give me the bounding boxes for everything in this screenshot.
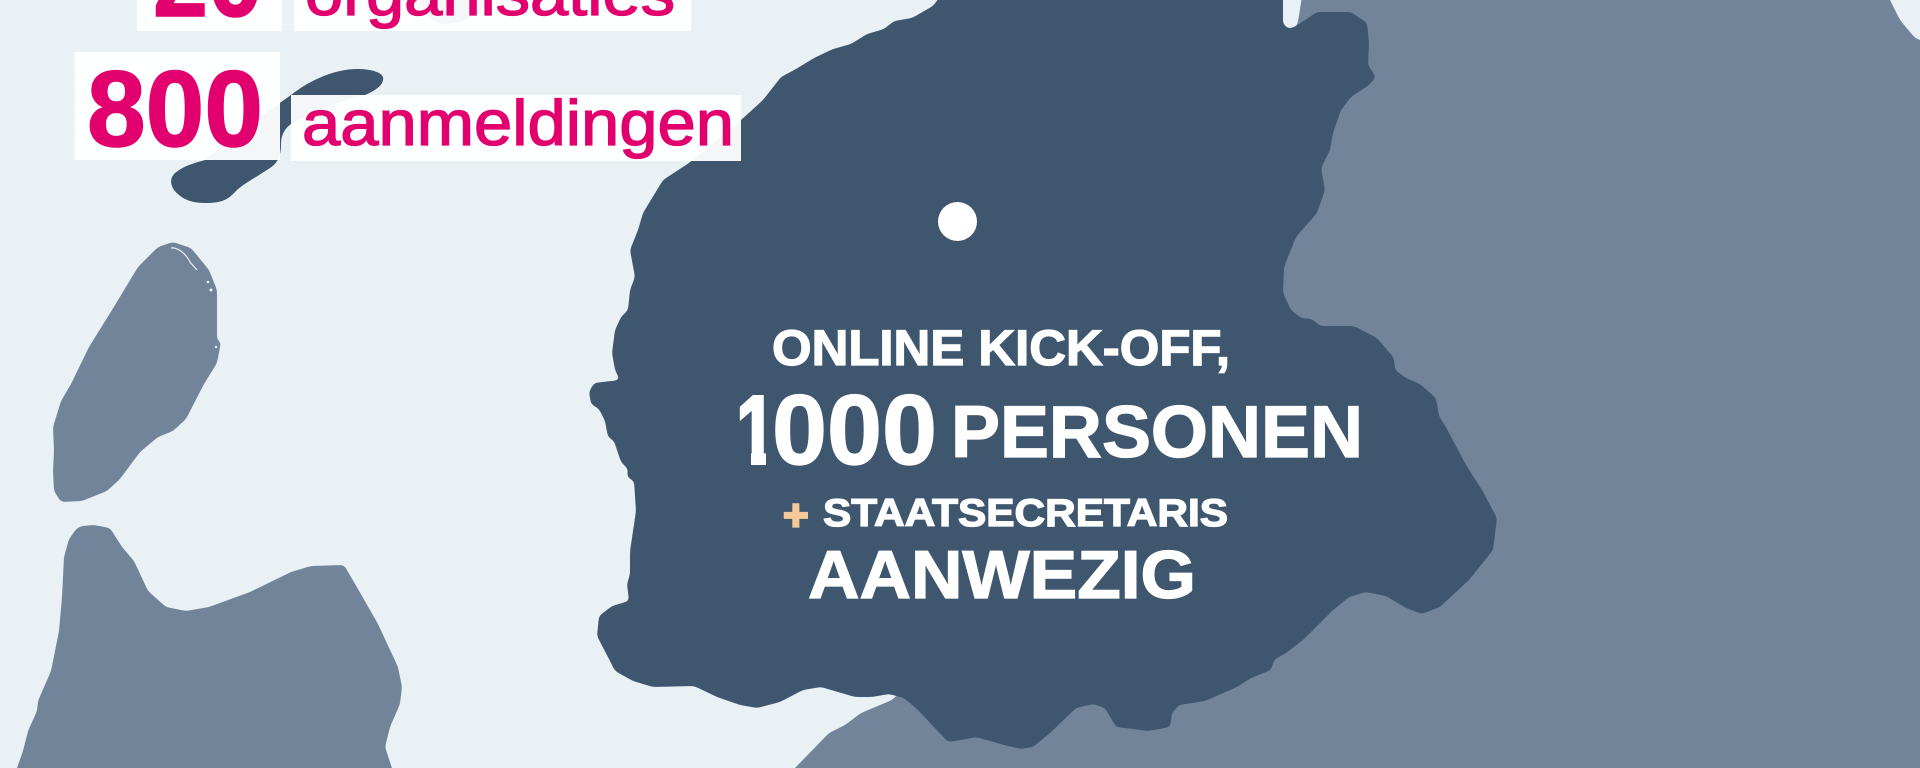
kick-off text block: 1 [736,375,776,486]
kick-off text block: ONLINE KICK-OFF, [772,320,1230,376]
region: Friesland [589,0,1497,749]
kick-off text block [736,320,1363,613]
kick-off text block: 000 [772,374,937,485]
island: Terschelling [171,69,383,203]
stat: 800 aanmeldingen: aanmeldingen [302,87,734,159]
kick-off text block: + [783,491,809,540]
kick-off text block: STAATSECRETARIS [823,492,1228,535]
island: Texel [53,242,221,502]
kick-off text block: PERSONEN [951,392,1363,473]
island: Vlieland and North Holland [8,525,402,768]
stat: 20 organisaties [137,0,691,39]
stat: 800 aanmeldingen: 800 [87,48,263,169]
kick-off text block: AANWEZIG [808,537,1196,613]
island: Ameland [420,0,490,24]
marker dot [938,202,977,241]
stat: 800 aanmeldingen [74,48,741,169]
mainland east and south [765,0,1920,768]
